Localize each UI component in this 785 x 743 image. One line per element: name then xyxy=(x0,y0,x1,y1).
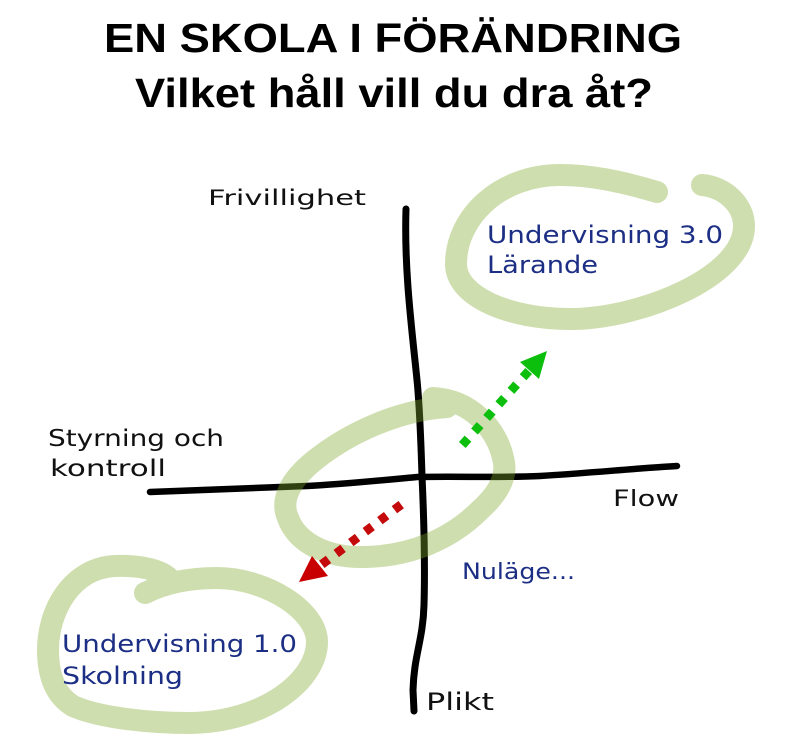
label: Nuläge: Nuläge... xyxy=(462,560,575,585)
title: Vilket håll vill du dra åt? xyxy=(135,70,653,116)
title xyxy=(104,15,682,116)
title: EN SKOLA I FÖRÄNDRING xyxy=(104,15,682,61)
label: Flow: Flow xyxy=(613,487,679,512)
label: Undervisning 1.0 Skolning: Undervisning 1.0 xyxy=(62,630,297,658)
circle: Undervisning 1.0 xyxy=(48,566,317,723)
label: Undervisning 3.0 Lärande xyxy=(487,221,723,279)
arrow: red down-left xyxy=(299,505,401,582)
label: Undervisning 1.0 Skolning xyxy=(62,630,297,690)
label: Frivillighet: Frivillighet xyxy=(208,186,366,210)
axes xyxy=(150,209,677,711)
label: Styrning och kontroll xyxy=(48,426,224,482)
label: Styrning och kontroll: Styrning och xyxy=(48,426,224,452)
arrow: green up-right xyxy=(462,351,547,445)
label: Undervisning 3.0 Lärande: Lärande xyxy=(487,251,598,279)
label: Styrning och kontroll: kontroll xyxy=(50,456,166,482)
label: Plikt: Plikt xyxy=(426,688,494,716)
label: Undervisning 3.0 Lärande: Undervisning 3.0 xyxy=(487,221,723,249)
label: Undervisning 1.0 Skolning: Skolning xyxy=(62,662,183,690)
circle: Nuläge xyxy=(285,398,504,557)
circle: Undervisning 3.0 xyxy=(456,175,744,319)
